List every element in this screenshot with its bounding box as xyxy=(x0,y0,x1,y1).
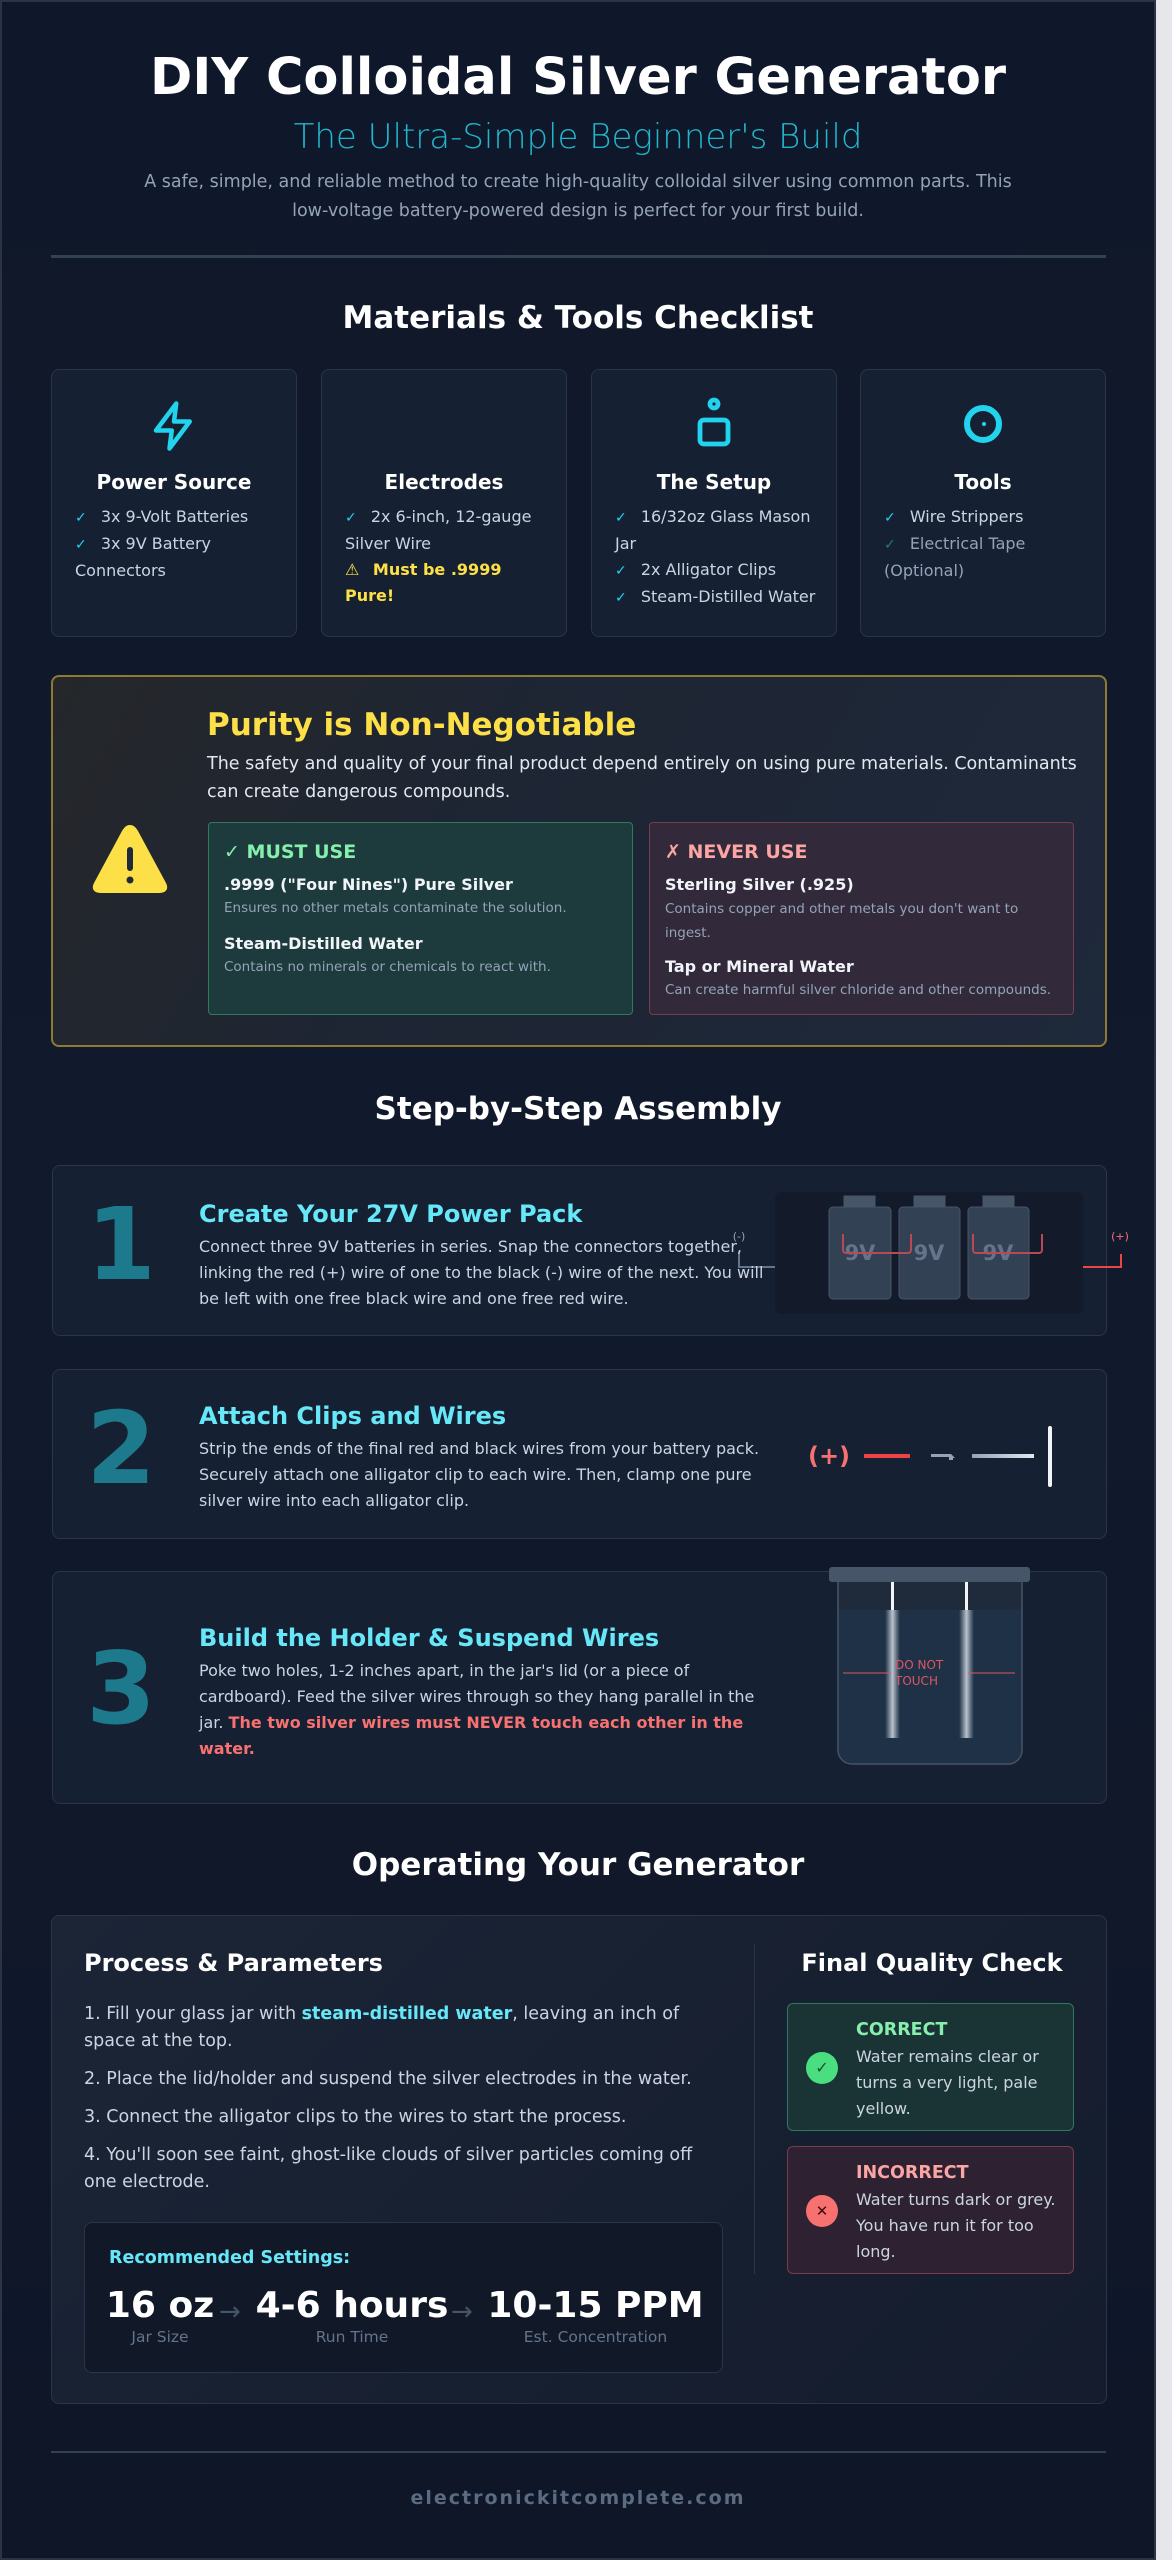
box: incorrect: ✕ xyxy=(816,2202,828,2220)
step 3 xyxy=(52,1571,1107,1804)
box: recommended settings: Est. Concentration xyxy=(524,2328,667,2346)
box: must use: Steam-Distilled Water xyxy=(224,934,423,953)
card: setup: The Setup xyxy=(657,470,771,494)
card: tools: Tools xyxy=(954,470,1012,494)
card: power source: ✓ 3x 9V Battery Connectors xyxy=(75,534,211,580)
box: never use: Can create harmful silver chloride and other compounds. xyxy=(665,982,1051,998)
illustration: clip and wire xyxy=(808,1426,1052,1487)
illustration: jar: TOUCH xyxy=(894,1674,938,1688)
text: step 1: Connect three 9V batteries in series. Snap the connectors together, linking the red (+) wire of one to the black (-) wire of the next. You will be left with one free black wire and one free red wire. xyxy=(199,1237,763,1308)
illustration: battery pack: 9V xyxy=(914,1241,945,1265)
step 3: Build the Holder & Suspend Wires xyxy=(199,1624,659,1652)
card: power source: Power Source xyxy=(97,470,251,494)
box: never use: ✗ NEVER USE xyxy=(665,841,807,863)
box: recommended settings: Jar Size xyxy=(131,2328,189,2346)
card: setup: ✓ 2x Alligator Clips xyxy=(615,560,776,579)
box: must use: Contains no minerals or chemicals to react with. xyxy=(224,959,551,975)
heading: materials: Materials & Tools Checklist xyxy=(342,300,814,336)
list: steps: 2. Place the lid/holder and suspend the silver electrodes in the water. xyxy=(84,2069,692,2089)
box: incorrect xyxy=(787,2146,1074,2274)
heading: steps: Step-by-Step Assembly xyxy=(375,1091,781,1127)
list: steps: 3. Connect the alligator clips to the wires to start the process. xyxy=(84,2107,626,2127)
illustration: jar xyxy=(829,1567,1030,1765)
box: correct xyxy=(787,2003,1074,2131)
card: electrodes: ⚠ Must be .9999 Pure! xyxy=(345,560,501,605)
text: purity intro: The safety and quality of your final product depend entirely on using pure materials. Contaminants can create dangerous compounds. xyxy=(207,754,1077,802)
panel: purity xyxy=(51,675,1107,1047)
card: power source: ✓ 3x 9-Volt Batteries xyxy=(75,507,248,526)
card: power source xyxy=(51,369,297,637)
step 1 xyxy=(52,1165,1107,1336)
box: correct: CORRECT xyxy=(856,2020,947,2040)
list: steps: 4. You'll soon see faint, ghost-like clouds of silver particles coming off one electrode. xyxy=(84,2145,692,2192)
box: never use: Tap or Mineral Water xyxy=(665,957,854,976)
step 3: Poke two holes, 1-2 inches apart, in the jar's lid (or a piece of cardboard). Feed the silver wires through so they hang parallel in the jar. The two silver wires must NEVER touch each other in the water. xyxy=(199,1661,754,1758)
list: steps xyxy=(84,2004,692,2192)
list: steps: 1. Fill your glass jar with steam-distilled water, leaving an inch of space at the top. xyxy=(84,2004,679,2051)
illustration: battery pack: (+) xyxy=(1111,1230,1129,1243)
step 1: Create Your 27V Power Pack xyxy=(199,1200,582,1228)
box: recommended settings: Run Time xyxy=(316,2328,388,2346)
footer: electronickitcomplete.com xyxy=(410,2487,746,2509)
box: never use: Sterling Silver (.925) xyxy=(665,875,854,894)
heading: process: Process & Parameters xyxy=(84,1949,383,1977)
intro text: A safe, simple, and reliable method to create high-quality colloidal silver using common parts. This low-voltage battery-powered design is perfect for your first build. xyxy=(144,172,1012,221)
illustration: battery pack: (-) xyxy=(733,1230,745,1243)
box: correct: Water remains clear or turns a very light, pale yellow. xyxy=(856,2047,1039,2118)
icon: lightning xyxy=(154,401,192,451)
card: electrodes: Electrodes xyxy=(385,470,503,494)
box: recommended settings: 16 oz xyxy=(106,2285,214,2326)
title: DIY Colloidal Silver Generator xyxy=(150,48,1006,107)
illustration: battery pack: 9V xyxy=(845,1241,876,1265)
box: correct: ✓ xyxy=(815,2058,829,2077)
step 2: Strip the ends of the final red and black wires from your battery pack. Securely attach one alligator clip to each wire. Then, clamp one pure silver wire into each alligator clip. xyxy=(199,1439,759,1510)
heading: operating: Operating Your Generator xyxy=(352,1847,804,1883)
box: recommended settings: 4-6 hours xyxy=(256,2285,448,2326)
box: recommended settings: → xyxy=(219,2297,241,2327)
box: must use xyxy=(208,822,633,1015)
box: must use: ✓ MUST USE xyxy=(224,841,356,863)
box: recommended settings: 10-15 PPM xyxy=(487,2285,704,2326)
card: tools: ✓ Wire Strippers xyxy=(884,507,1023,526)
box: recommended settings xyxy=(84,2222,723,2373)
heading: purity: Purity is Non-Negotiable xyxy=(207,707,636,743)
step 2 xyxy=(52,1369,1107,1539)
card: tools xyxy=(860,369,1106,637)
card: electrodes: ✓ 2x 6-inch, 12-gauge Silver Wire xyxy=(345,507,531,553)
box: never use xyxy=(649,822,1074,1015)
box: must use: .9999 ("Four Nines") Pure Silver xyxy=(224,875,513,894)
illustration: clip and wire: (+) xyxy=(808,1442,850,1470)
box: must use: Ensures no other metals contaminate the solution. xyxy=(224,900,567,916)
box: recommended settings: Recommended Settings: xyxy=(109,2248,350,2268)
box: incorrect: Water turns dark or grey. You have run it for too long. xyxy=(856,2190,1056,2261)
card: setup: ✓ Steam-Distilled Water xyxy=(615,587,815,606)
icon: warning xyxy=(92,825,168,893)
card: electrodes xyxy=(321,369,567,637)
subtitle: The Ultra-Simple Beginner's Build xyxy=(294,117,862,157)
illustration: battery pack xyxy=(733,1192,1129,1314)
step 3: 3 xyxy=(86,1630,156,1747)
step 2: 2 xyxy=(86,1390,156,1507)
card: setup: ✓ 16/32oz Glass Mason Jar xyxy=(615,507,810,553)
card: tools: ✓ Electrical Tape (Optional) xyxy=(884,534,1025,580)
step 2: Attach Clips and Wires xyxy=(199,1402,506,1430)
icon: tool ring xyxy=(964,405,1002,443)
box: incorrect: INCORRECT xyxy=(856,2163,969,2183)
illustration: jar: DO NOT xyxy=(895,1658,944,1672)
heading: quality check: Final Quality Check xyxy=(801,1949,1063,1977)
box: never use: Contains copper and other metals you don't want to ingest. xyxy=(665,901,1018,941)
panel: operating xyxy=(51,1915,1107,2404)
step 1: 1 xyxy=(86,1186,156,1303)
icon: jar xyxy=(698,398,730,446)
card: setup xyxy=(591,369,837,637)
illustration: battery pack: 9V xyxy=(983,1241,1014,1265)
box: recommended settings: → xyxy=(451,2297,473,2327)
